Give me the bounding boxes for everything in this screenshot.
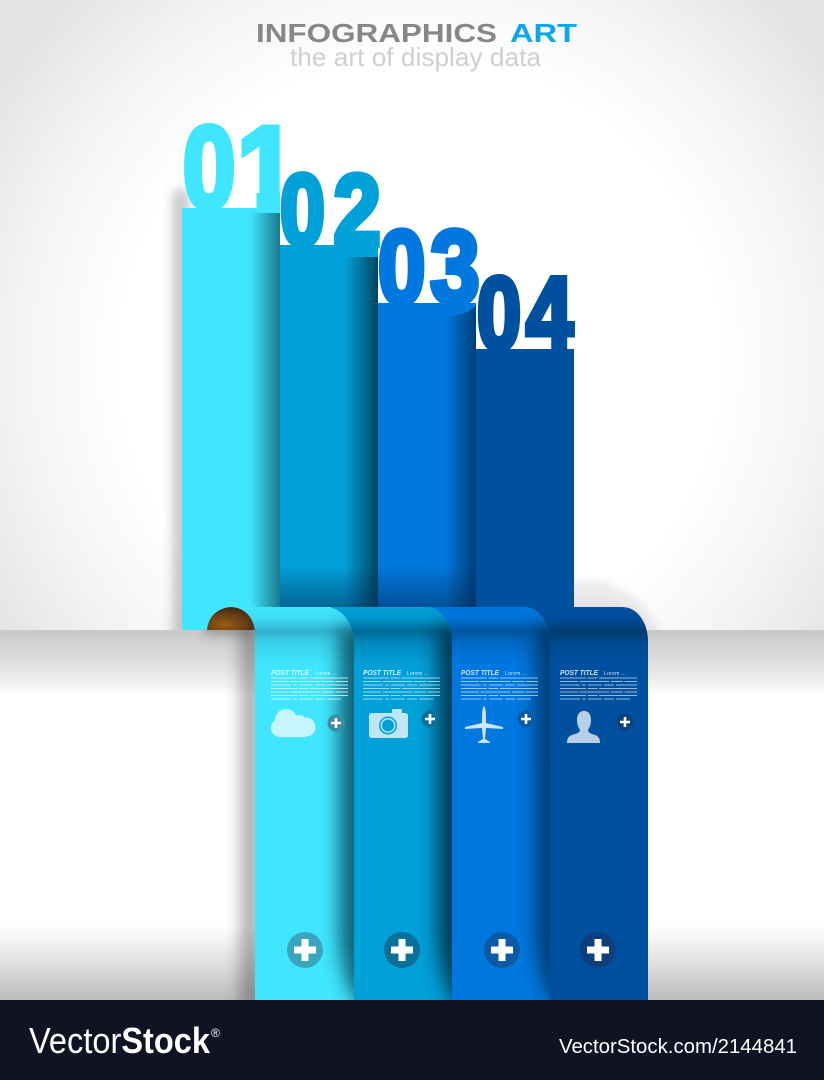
text block	[461, 670, 538, 699]
number 01: 0	[183, 103, 236, 233]
text block	[271, 670, 348, 699]
number 03: 0	[378, 210, 425, 326]
text block: POST TITLE	[461, 670, 499, 677]
title: INFOGRAPHICS	[256, 18, 497, 48]
text block: Lorem ...	[505, 671, 527, 677]
text block: POST TITLE	[271, 670, 309, 677]
footer bar	[0, 1000, 824, 1080]
cast shadow above right ribbons	[574, 580, 658, 630]
panel: ribbon 1	[230, 607, 354, 1000]
panel: bar 03	[378, 210, 480, 607]
panel: bar 04	[476, 256, 574, 607]
cast shadow beside first bar	[174, 190, 188, 660]
icon: cloud	[271, 709, 316, 737]
number 04: 4	[526, 256, 573, 371]
background: lower floor	[0, 630, 824, 1000]
text block	[363, 670, 440, 699]
number 03: 3	[430, 210, 480, 326]
number 04	[477, 256, 573, 371]
number 01: 1	[237, 102, 297, 233]
footer image id: VectorStock.com/2144841	[559, 1036, 797, 1058]
panel: ribbon 3	[426, 607, 550, 1000]
icon: large plus	[580, 932, 616, 968]
icon: person	[567, 711, 600, 743]
number 03	[378, 210, 480, 326]
panel: ribbon 4	[520, 607, 648, 1000]
icon: small plus	[328, 714, 344, 732]
title: ART	[510, 18, 577, 48]
text block	[560, 670, 637, 699]
number 02	[280, 154, 381, 267]
icon: small plus	[616, 714, 634, 730]
number 02: 2	[334, 154, 381, 267]
title	[256, 18, 577, 48]
icon: large plus	[384, 932, 420, 968]
icon: small plus	[518, 710, 534, 728]
icon: airplane	[465, 706, 503, 743]
number 02: 0	[280, 154, 325, 267]
icon: curl underside	[207, 607, 256, 630]
text block: Lorem ...	[604, 671, 626, 677]
text block: Lorem ...	[407, 671, 429, 677]
number 04: 0	[477, 257, 521, 371]
text block: POST TITLE	[560, 670, 598, 677]
floor shadows beside ribbon	[205, 622, 259, 1010]
icon: large plus	[287, 932, 323, 968]
text block: Lorem ...	[315, 671, 337, 677]
icon: camera	[369, 709, 408, 738]
panel: ribbon 2	[330, 607, 452, 1000]
icon: small plus	[422, 710, 438, 728]
icon: large plus	[484, 932, 520, 968]
panel: bar 01	[182, 123, 280, 630]
subtitle: the art of display data	[290, 42, 542, 72]
panel: bar 02	[280, 154, 381, 607]
shade at foot of bars	[280, 565, 476, 607]
text block: POST TITLE	[363, 670, 401, 677]
background: upper wall	[0, 0, 824, 630]
number 01	[184, 123, 280, 208]
footer logo: VectorStock	[29, 1020, 211, 1061]
registered mark: ®	[211, 1026, 220, 1040]
